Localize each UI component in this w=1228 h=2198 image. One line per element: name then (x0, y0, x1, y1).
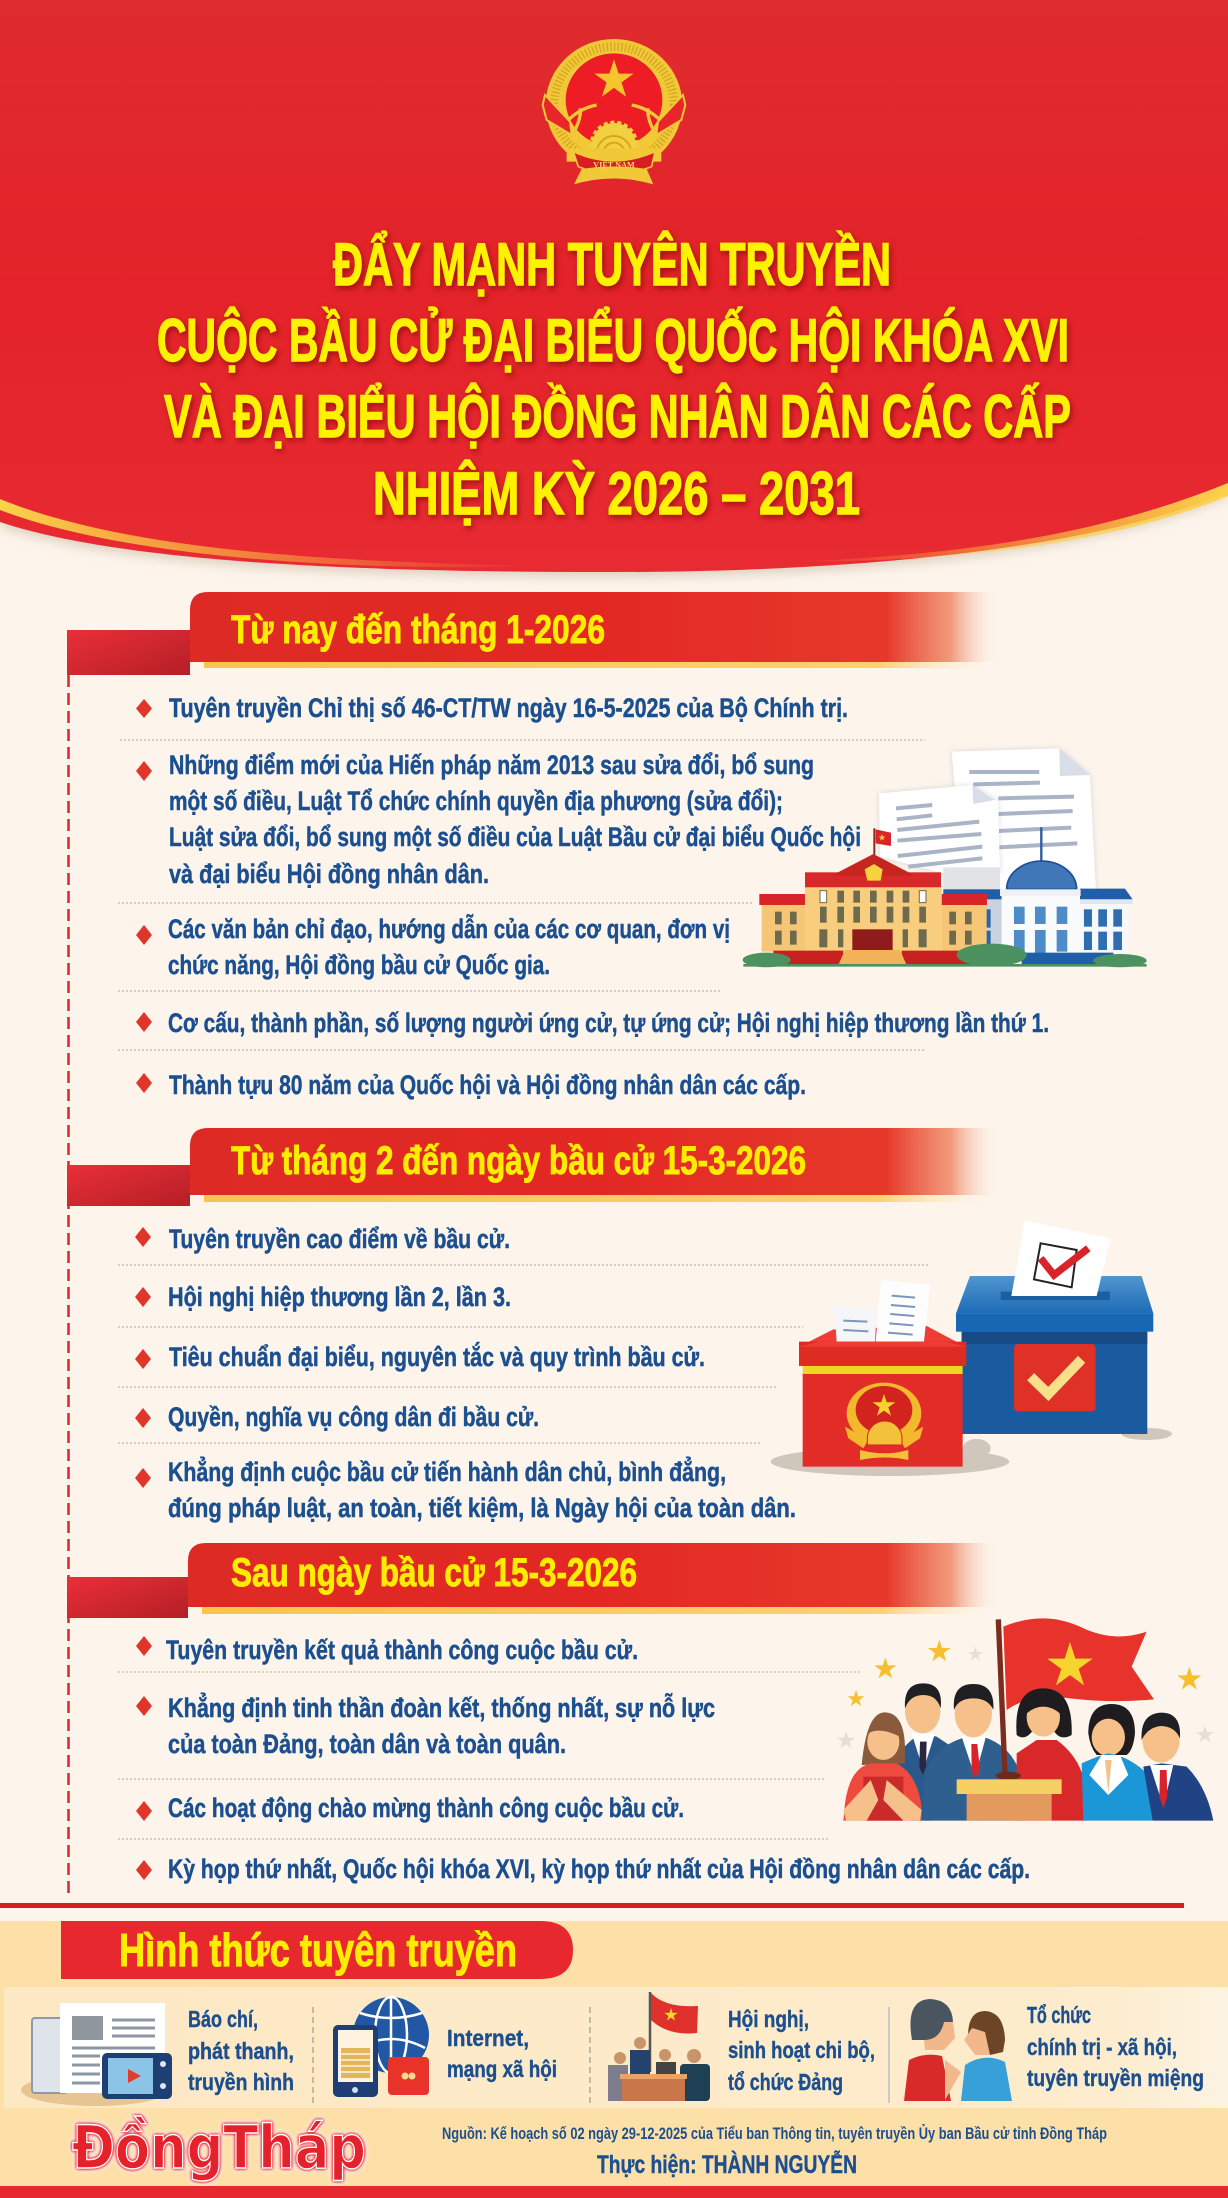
section 2 heading banner: Từ tháng 2 đến ngày bầu cử 15-3-2026 (231, 1139, 806, 1183)
bullet item: Khẳng định cuộc bầu cử tiến hành dân chủ, bình đẳng, (168, 1455, 726, 1487)
section 1 heading banner (67, 592, 1000, 675)
bullet item: Thành tựu 80 năm của Quốc hội và Hội đồng nhân dân các cấp. (169, 1070, 806, 1100)
icon: two people talking (904, 1999, 1012, 2101)
bullet item (136, 1691, 715, 1759)
bullet item: Tuyên truyền kết quả thành công cuộc bầu cử. (166, 1635, 638, 1665)
illustration: parliament buildings and documents (743, 748, 1147, 967)
bullet item: của toàn Đảng, toàn dân và toàn quân. (168, 1729, 566, 1759)
bullet item: và đại biểu Hội đồng nhân dân. (169, 859, 489, 889)
bullet item: Những điểm mới của Hiến pháp năm 2013 sau sửa đổi, bổ sung (169, 750, 814, 780)
icon: national emblem: VIỆT NAM (593, 160, 635, 170)
bullet item (136, 750, 861, 889)
text: press: truyền hình (188, 2069, 294, 2095)
logo: Đồng Tháp: ĐồngTháp (72, 2113, 366, 2183)
title: ĐẨY MẠNH TUYÊN TRUYỀN (333, 231, 891, 298)
text: press: Báo chí, (188, 2006, 258, 2032)
bullet item (136, 913, 730, 980)
author credit: Thực hiện: THÀNH NGUYỄN (597, 2149, 857, 2179)
bullet item: Các hoạt động chào mừng thành công cuộc bầu cử. (168, 1793, 684, 1823)
text: conferences: Hội nghị, (728, 2006, 809, 2032)
section 2 heading banner (67, 1128, 1000, 1206)
bullet item: Hội nghị hiệp thương lần 2, lần 3. (168, 1282, 511, 1312)
text: internet (447, 2025, 557, 2082)
podium (957, 1772, 1062, 1821)
icon: national emblem (543, 39, 685, 184)
bullet item: Quyền, nghĩa vụ công dân đi bầu cử. (168, 1402, 539, 1432)
person: woman in blue (1082, 1704, 1153, 1821)
person: woman in red (1016, 1688, 1086, 1821)
bullet item: Luật sửa đổi, bổ sung một số điều của Luật Bầu cử đại biểu Quốc hội (169, 822, 861, 852)
bullet item: Tiêu chuẩn đại biểu, nguyên tắc và quy trình bầu cử. (169, 1341, 705, 1372)
text: organizations (1027, 2002, 1204, 2091)
footer bar (0, 2186, 1228, 2198)
text: internet: Internet, (447, 2025, 529, 2051)
text: conferences: sinh hoạt chi bộ, (728, 2037, 875, 2063)
person: woman clasping hands (843, 1712, 922, 1821)
bullet item: một số điều, Luật Tổ chức chính quyền địa phương (sửa đổi); (169, 786, 783, 816)
bullet item: Khẳng định tinh thần đoàn kết, thống nhất, sự nỗ lực (168, 1691, 715, 1723)
bullet item: chức năng, Hội đồng bầu cử Quốc gia. (168, 950, 550, 980)
section 3 heading banner (67, 1543, 1000, 1618)
text: press: phát thanh, (188, 2038, 294, 2064)
illustration: ballot boxes (771, 1221, 1172, 1476)
title: NHIỆM KỲ 2026 – 2031 (373, 460, 860, 527)
bullet item: Tuyên truyền cao điểm về bầu cử. (169, 1224, 510, 1254)
bullet item: Tuyên truyền Chỉ thị số 46-CT/TW ngày 16-5-2025 của Bộ Chính trị. (169, 693, 848, 723)
section 1 heading banner: Từ nay đến tháng 1-2026 (231, 608, 605, 652)
panel: section 1 (67, 592, 1049, 1100)
section 3 heading banner: Sau ngày bầu cử 15-3-2026 (231, 1551, 637, 1595)
icon: newspaper and tablet (21, 2003, 172, 2106)
illustration: people with flag (837, 1618, 1214, 1821)
header panel (0, 0, 1228, 572)
icon: conference podium and flag (608, 1992, 710, 2101)
text: conferences (728, 2006, 875, 2095)
person: man on right (1142, 1713, 1213, 1821)
bullet item: Các văn bản chỉ đạo, hướng dẫn của các cơ quan, đơn vị (168, 913, 730, 944)
panel: section 2 (67, 1128, 1000, 1523)
panel: section 3 (67, 1543, 1030, 1884)
bottom divider line (0, 1903, 1184, 1908)
icon: globe and phone (333, 1997, 429, 2097)
section heading pill: Hình thức tuyên truyền (119, 1924, 517, 1976)
text: internet: mạng xã hội (447, 2056, 557, 2082)
text: organizations: chính trị - xã hội, (1027, 2034, 1177, 2060)
person: man in navy suit (893, 1683, 952, 1821)
panel: propaganda forms (0, 1921, 1228, 2186)
bullet item: đúng pháp luật, an toàn, tiết kiệm, là Ngày hội của toàn dân. (168, 1493, 796, 1523)
bullet item (135, 1455, 796, 1523)
title (157, 231, 1071, 527)
text: conferences: tổ chức Đảng (728, 2069, 843, 2095)
timeline dashed line (67, 675, 70, 1898)
text: organizations: Tổ chức (1027, 2002, 1091, 2028)
text: press (188, 2006, 294, 2095)
person: man in blue suit (923, 1684, 1020, 1821)
